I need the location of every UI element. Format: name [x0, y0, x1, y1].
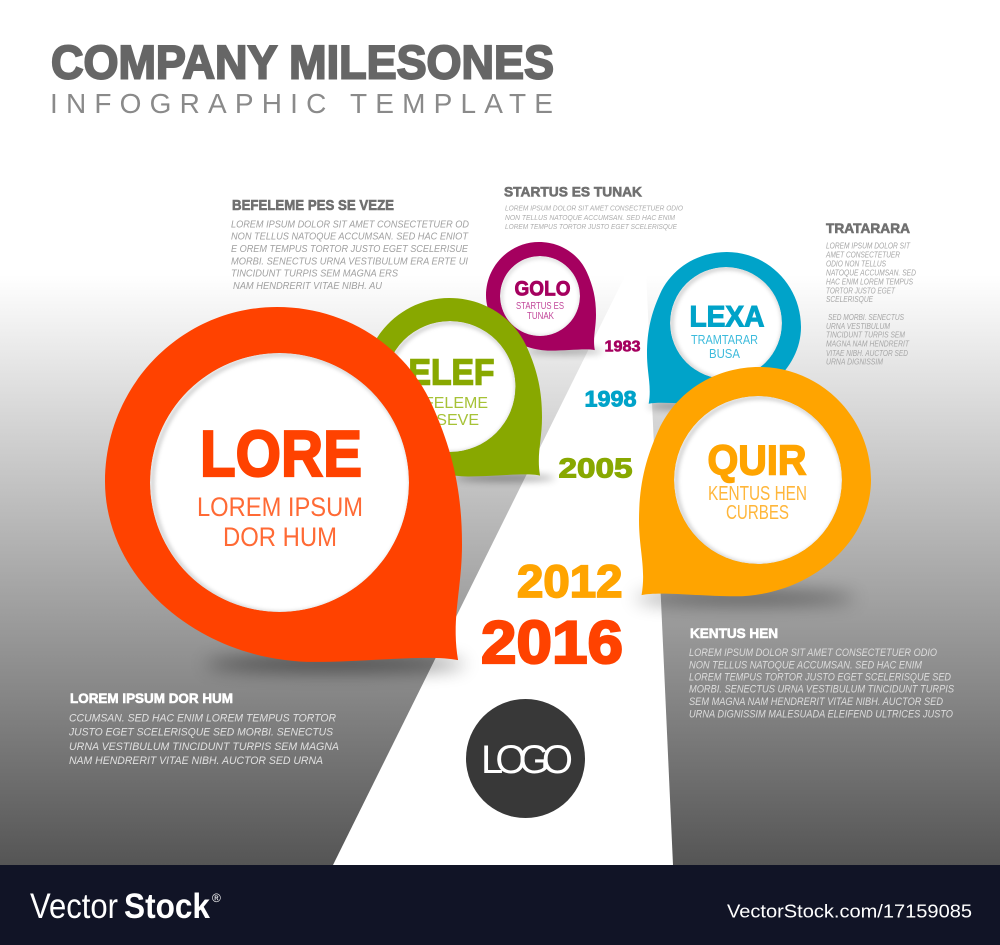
pin: elef: [363, 298, 542, 476]
shadows beneath pins: [455, 348, 712, 481]
text block: lorem ipsum dor hum: [68, 690, 339, 767]
text block: tratarara: [825, 220, 916, 366]
year 2016: 2016: [481, 608, 623, 676]
white timeline road: [333, 270, 673, 865]
text block: kentus hen: LOREM IPSUM DOLOR SIT AMET CONSECTETUER ODIO: [689, 647, 937, 659]
year 1998: 1998: [584, 386, 636, 411]
text block: tratarara: SED MORBI. SENECTUS: [828, 313, 904, 322]
text block: tratarara: HAC ENIM LOREM TEMPUS: [826, 277, 913, 286]
title: [50, 36, 554, 119]
text block: befeleme: [231, 198, 470, 292]
footer url: VectorStock.com/17159085: [727, 902, 972, 922]
text block: tratarara: TRATARARA: [826, 220, 910, 236]
text block: befeleme: NON TELLUS NATOQUE ACCUMSAN. SED HAC ENIOT: [231, 232, 469, 242]
pin label: BEFELEME: [403, 395, 488, 412]
text block: startus es tunak: LOREM TEMPUS TORTOR JUSTO EGET SCELERISQUE: [505, 222, 677, 231]
pin: lore: [105, 307, 462, 662]
shadow under red pin: [205, 657, 465, 671]
text block: tratarara: LOREM IPSUM DOLOR SIT: [826, 241, 911, 250]
text block: tratarara: ODIO NON TELLUS: [826, 260, 886, 269]
text block: kentus hen: SEM MAGNA NAM HENDRERIT VITAE NIBH. AUCTOR SED: [689, 696, 943, 708]
text block: befeleme: LOREM IPSUM DOLOR SIT AMET CONSECTETUER OD: [231, 219, 470, 230]
pin label: KENTUS HEN: [708, 483, 807, 505]
footer bar: [0, 865, 1000, 945]
text block: startus es tunak: STARTUS ES TUNAK: [504, 184, 642, 200]
pin label: STARTUS ES: [516, 301, 564, 312]
text block: tratarara: NATOQUE ACCUMSAN. SED: [826, 269, 916, 278]
pin label: LOREM IPSUM: [197, 492, 363, 522]
shadow under orange pin: [635, 592, 855, 604]
text block: kentus hen: MORBI. SENECTUS URNA VESTIBULUM TINCIDUNT TURPIS: [689, 684, 954, 696]
pin label: GOLO: [514, 277, 570, 301]
pin: golo: [486, 242, 596, 351]
subtitle: INFOGRAPHIC TEMPLATE: [50, 88, 553, 119]
text block: tratarara: URNA DIGNISSIM: [826, 358, 883, 366]
year 2012: 2012: [517, 556, 622, 607]
pin label: QUIR: [708, 436, 806, 483]
text block: lorem ipsum dor hum: LOREM IPSUM DOR HUM: [70, 690, 233, 706]
text block: tratarara: TORTOR JUSTO EGET: [826, 286, 896, 295]
pin: quir: [639, 367, 871, 596]
footer brand: Stock: [124, 887, 210, 926]
year 2005: 2005: [558, 452, 632, 484]
pin label: [514, 277, 570, 322]
pin label: ELEF: [408, 352, 494, 392]
pin label: CURBES: [726, 502, 789, 524]
text block: befeleme: NAM HENDRERIT VITAE NIBH. AU: [233, 281, 383, 292]
text block: kentus hen: [689, 625, 954, 721]
text block: befeleme: MORBI. SENECTUS URNA VESTIBULUM ERA ERTE UI: [231, 256, 468, 267]
pin hole: [670, 267, 784, 380]
pin label: LORE: [200, 417, 362, 490]
pin label: [197, 417, 363, 552]
text block: tratarara: VITAE NIBH. AUCTOR SED: [826, 349, 908, 358]
footer brand: ®: [212, 891, 221, 905]
text block: kentus hen: URNA DIGNISSIM MALESUADA ELEIFEND ULTRICES JUSTO: [689, 709, 953, 721]
text block: lorem ipsum dor hum: URNA VESTIBULUM TINCIDUNT TURPIS SEM MAGNA: [69, 741, 339, 753]
footer brand: Vector: [30, 887, 118, 926]
logo badge: LOGO: [481, 738, 573, 782]
text block: kentus hen: LOREM TEMPUS TORTOR JUSTO EGET SCELERISQUE SED: [689, 672, 951, 684]
text block: startus es tunak: LOREM IPSUM DOLOR SIT AMET CONSECTETUER ODIO: [505, 204, 683, 213]
pin label: TUNAK: [527, 311, 554, 322]
pin label: [400, 352, 494, 429]
text block: lorem ipsum dor hum: CCUMSAN. SED HAC ENIM LOREM TEMPUS TORTOR: [69, 713, 336, 725]
text block: tratarara: AMET CONSECTETUER: [825, 250, 900, 259]
pin hole: [674, 396, 844, 566]
logo badge: [466, 699, 585, 818]
text block: tratarara: URNA VESTIBULUM: [826, 322, 890, 331]
pin label: [708, 436, 807, 524]
text block: befeleme: BEFELEME PES SE VEZE: [232, 198, 394, 214]
text block: befeleme: E OREM TEMPUS TORTOR JUSTO EGET SCELERISUE: [231, 244, 468, 255]
pin hole: [384, 321, 517, 454]
main heading: COMPANY MILESONES: [51, 36, 554, 90]
year 1983: 1983: [604, 339, 641, 356]
pin hole: [500, 256, 581, 337]
footer brand: [30, 887, 221, 926]
pin label: BUSA: [709, 346, 740, 361]
pin label: DOR HUM: [223, 522, 337, 552]
text block: lorem ipsum dor hum: NAM HENDRERIT VITAE NIBH. AUCTOR SED URNA: [69, 755, 323, 767]
pin label: [690, 300, 764, 361]
pin hole: [150, 353, 412, 614]
text block: startus es tunak: NON TELLUS NATOQUE ACCUMSAN. SED HAC ENIM: [505, 213, 676, 222]
text block: tratarara: MAGNA NAM HENDRERIT: [826, 340, 910, 349]
text block: befeleme: TINCIDUNT TURPIS SEM MAGNA ERS: [231, 269, 398, 280]
text block: tratarara: SCELERISQUE: [826, 295, 873, 304]
pin label: LEXA: [690, 300, 764, 334]
pin label: TRAMTARAR: [691, 332, 758, 347]
text block: lorem ipsum dor hum: JUSTO EGET SCELERISQUE SED MORBI. SENECTUS: [68, 727, 333, 739]
pin: lexa: [647, 252, 801, 405]
year labels: [481, 339, 641, 676]
text block: kentus hen: KENTUS HEN: [690, 625, 778, 641]
pin label: PES SEVE: [400, 412, 479, 429]
text block: tratarara: TINCIDUNT TURPIS SEM: [826, 331, 905, 340]
text block: kentus hen: NON TELLUS NATOQUE ACCUMSAN. SED HAC ENIM: [689, 659, 922, 671]
text block: startus es tunak: [504, 184, 683, 231]
